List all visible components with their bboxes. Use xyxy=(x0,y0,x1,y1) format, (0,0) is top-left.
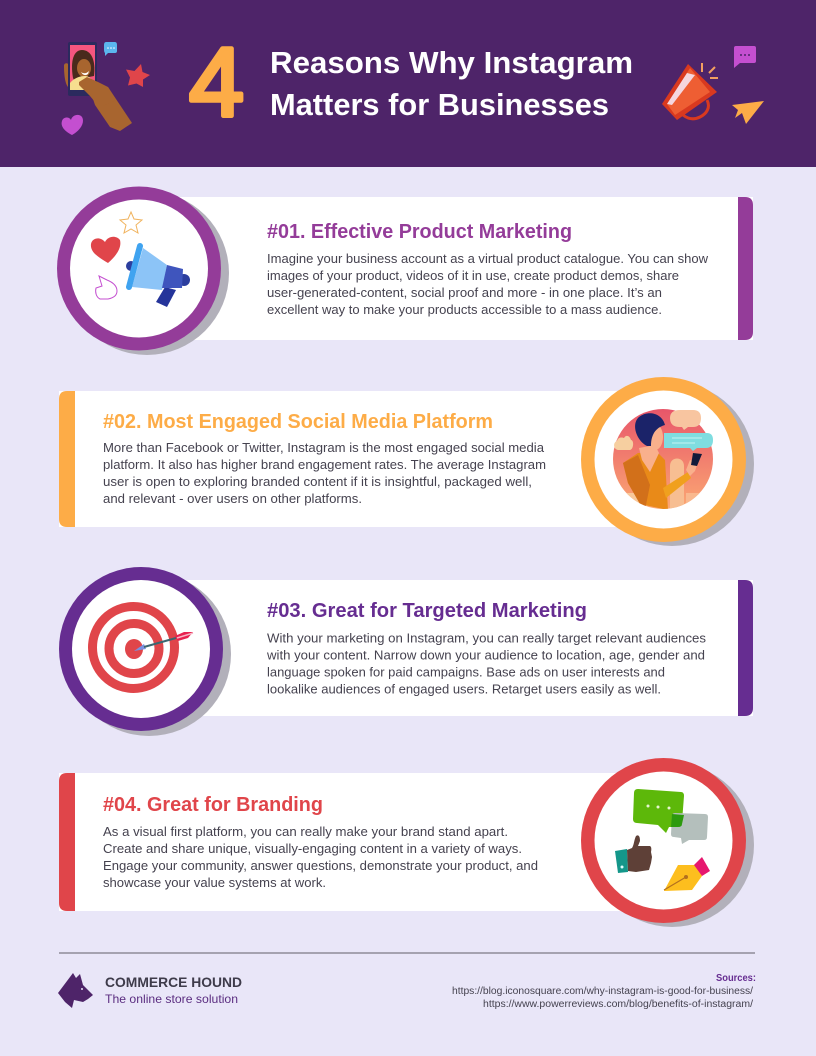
body text 1: excellent way to make your products accessible to a mass audience. xyxy=(267,302,662,317)
panel: reason 3 xyxy=(59,567,753,736)
heading 3: #03. Great for Targeted Marketing xyxy=(267,600,587,622)
body text 4: showcase your value systems at work. xyxy=(103,875,326,890)
title: Reasons Why Instagram xyxy=(270,45,633,80)
body text 1: images of your product, videos of it in use, create product demos, share xyxy=(267,268,679,283)
badge circle 1 xyxy=(57,186,229,355)
body text 1 xyxy=(267,251,709,317)
body text 4: Create and share unique, visually-engaging content in a variety of ways. xyxy=(103,841,522,856)
badge circle 3 xyxy=(59,567,231,736)
big number 4: 4 xyxy=(189,28,244,136)
body text 2: More than Facebook or Twitter, Instagram is the most engaged social media xyxy=(103,440,545,455)
panel: reason 1 xyxy=(57,186,753,355)
footer: sources xyxy=(452,973,756,1010)
footer: sources: https://blog.iconosquare.com/why-instagram-is-good-for-business/ xyxy=(452,986,753,997)
icon: megaphone with heart, star, thumb xyxy=(91,212,190,307)
title xyxy=(270,45,633,122)
brand name: COMMERCE HOUND xyxy=(105,974,242,990)
panel: reason 2 xyxy=(59,377,754,546)
heading 1: #01. Effective Product Marketing xyxy=(267,221,572,243)
badge circle 2 xyxy=(581,377,754,546)
badge circle 4 xyxy=(581,758,754,927)
body text 4 xyxy=(103,824,538,890)
title: Matters for Businesses xyxy=(270,87,609,122)
body text 2: user is open to exploring branded content if it is insightful, packaged well, xyxy=(103,474,532,489)
body text 3: with your content. Narrow down your audience to location, age, gender and xyxy=(266,648,705,662)
body text 2: and relevant - over users on other platforms. xyxy=(103,491,362,506)
icon: woman with phone xyxy=(612,409,716,513)
icon: hand holding phone xyxy=(62,42,150,135)
heading 4: #04. Great for Branding xyxy=(103,794,323,816)
panel: reason 4 xyxy=(59,758,754,927)
body text 4: Engage your community, answer questions, demonstrate your product, and xyxy=(103,858,538,873)
icon: speech bubbles, thumb, pen xyxy=(615,789,710,891)
body text 3: language spoken for paid campaigns. Base ads on user interests and xyxy=(267,664,665,680)
body text 1: user-generated-content, social proof and more - in one place. It’s an xyxy=(267,285,662,300)
brand tagline: The online store solution xyxy=(105,992,238,1006)
body text 3 xyxy=(266,630,707,696)
footer: sources: https://www.powerreviews.com/blog/benefits-of-instagram/ xyxy=(483,999,753,1010)
body text 3: With your marketing on Instagram, you can really target relevant audiences xyxy=(267,630,707,646)
body text 1: Imagine your business account as a virtual product catalogue. You can show xyxy=(267,251,709,266)
body text 3: lookalike audiences of engaged users. Retarget users easily as well. xyxy=(267,682,661,696)
body text 4: As a visual first platform, you can really make your brand stand apart. xyxy=(103,824,508,839)
footer: brand xyxy=(58,973,242,1008)
heading 2: #02. Most Engaged Social Media Platform xyxy=(103,411,493,433)
footer: sources: Sources: xyxy=(716,973,756,984)
icon: red mug megaphone xyxy=(662,46,764,124)
body text 2: platform. It also has higher brand engagement rates. The average Instagram xyxy=(103,457,546,472)
icon: hound logo xyxy=(58,973,93,1008)
body text 2 xyxy=(103,440,546,506)
icon: target and arrow xyxy=(92,606,193,688)
header band xyxy=(0,0,816,167)
